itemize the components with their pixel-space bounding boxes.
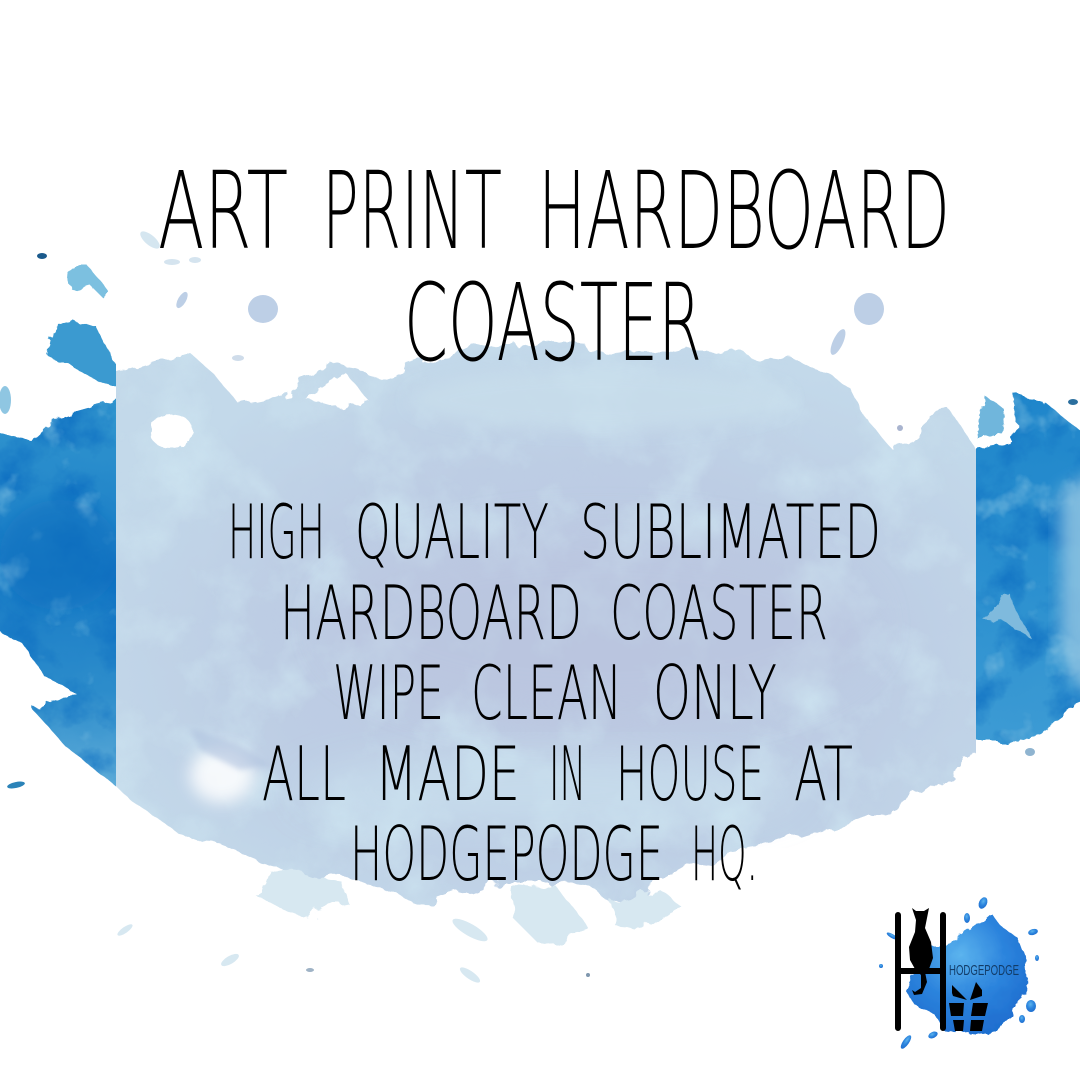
- product description text block: HQ.: [691, 810, 758, 898]
- title: ART: [158, 150, 288, 274]
- product description text block: MADE: [375, 730, 520, 818]
- logo: Hodgepodge: [879, 896, 1039, 1050]
- watercolour splash: deep blue right side: [976, 392, 1080, 756]
- logo gift box: [949, 982, 988, 1031]
- product description text block: HIGH: [228, 488, 325, 576]
- product description text block: ONLY: [653, 649, 777, 737]
- title: PRINT: [322, 150, 502, 274]
- product description text block: HARDBOARD: [280, 569, 582, 657]
- paint droplets on the upper splash: [138, 228, 903, 431]
- logo cat: [909, 908, 933, 995]
- product description text block: COASTER: [610, 569, 828, 657]
- product description text block: AT: [794, 730, 853, 818]
- product description text block: ALL: [262, 730, 346, 818]
- product description text block: HODGEPODGE: [350, 810, 663, 898]
- logo blue splash: [879, 896, 1039, 1050]
- product description text block: IN: [549, 730, 586, 818]
- product description text block: SUBLIMATED: [580, 488, 881, 576]
- product description text block: WIPE: [333, 649, 444, 737]
- logo wordmark: HODGEPODGE: [949, 962, 1019, 979]
- product description text block: HOUSE: [616, 730, 764, 818]
- watercolour splash: deep blue left side: [0, 253, 116, 788]
- title: [158, 150, 950, 386]
- product description text block: [228, 488, 881, 898]
- paint splatter below the wash: [116, 870, 680, 985]
- product description text block: QUALITY: [355, 488, 549, 576]
- watercolour splash: pale central wash: [70, 342, 1020, 905]
- logo letter H: [898, 915, 943, 1028]
- product description text block: CLEAN: [471, 649, 622, 737]
- title: COASTER: [404, 262, 702, 386]
